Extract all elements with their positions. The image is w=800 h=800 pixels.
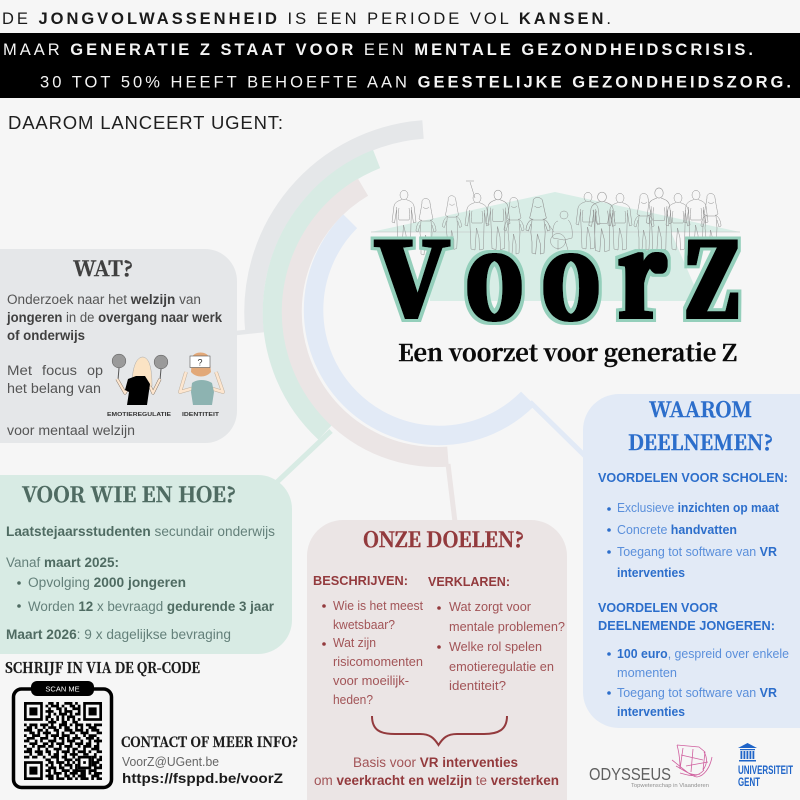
QR sign-up block: [5, 657, 200, 788]
list: beschrijven: Wat zijn: [333, 636, 376, 650]
list: verklaren: emotieregulatie en: [449, 660, 554, 674]
logo wordmark VoorZ: r: [618, 189, 667, 350]
logo: Universiteit Gent: [738, 743, 793, 789]
description text: Opvolging 2000 jongeren: [28, 575, 186, 590]
contact website: https://fsppd.be/voorZ: [122, 770, 283, 786]
person 9: [576, 192, 600, 249]
person 12: [634, 194, 654, 250]
icon captions: IDENTITEIT: [182, 412, 220, 418]
icon: pink ship: [672, 745, 712, 777]
panel: WAAROM DEELNEMEN: [583, 394, 800, 728]
icon captions: EMOTIEREGULATIE: [107, 412, 171, 418]
description text: jongeren in de overgang naar werk: [6, 310, 222, 325]
column headings: [313, 573, 510, 589]
person 16: [701, 194, 721, 250]
black banner: [0, 33, 800, 98]
list: verklaren: identiteit?: [449, 679, 506, 693]
scan me tab: [31, 681, 94, 696]
list: beschrijven: risicomomenten: [333, 655, 423, 669]
Odysseus tagline: Topwetenschap in Vlaanderen: [631, 783, 709, 789]
logo wordmark VoorZ: [375, 189, 739, 351]
description text: het belang van: [7, 381, 101, 396]
youth benefits list: momenten: [617, 666, 677, 680]
conclusion text: om veerkracht en welzijn te versterken: [314, 773, 559, 788]
description text: of onderwijs: [7, 328, 85, 343]
list: verklaren: Wat zorgt voor: [449, 600, 531, 614]
logo tagline: Een voorzet voor generatie Z: [398, 335, 737, 368]
person 13: [646, 188, 672, 250]
school benefits list: Concrete handvatten: [617, 523, 737, 537]
banner line: geestelijke gezondheidszorg: 30 TOT 50% HEEFT BEHOEFTE AAN GEESTELIJKE GEZONDHEIDSZORG.: [40, 74, 791, 92]
icon: identity person holding question card: [180, 352, 223, 405]
list: verklaren: Welke rol spelen: [449, 640, 542, 654]
pink ring to ONZE DOELEN panel: [292, 187, 455, 522]
person 7: [526, 198, 550, 254]
logo wordmark VoorZ: o: [542, 190, 600, 351]
person 2: [416, 198, 436, 255]
panel heading: WAT?: [73, 253, 133, 283]
conclusion text: [314, 755, 559, 788]
person 11: [608, 193, 632, 250]
list: beschrijven: Wie is het meest: [333, 599, 424, 613]
logo wordmark VoorZ: V: [375, 201, 449, 346]
panel: ONZE DOELEN: [307, 520, 567, 800]
column headings: BESCHRIJVEN:: [313, 573, 408, 588]
panel background: [307, 520, 567, 800]
description text: Worden 12 x bevraagd gedurende 3 jaar: [28, 599, 275, 614]
description text: Laatstejaarsstudenten secundair onderwijs: [6, 524, 275, 539]
school benefits list: Toegang tot software van VR: [617, 545, 777, 559]
sign-up heading: SCHRIJF IN VIA DE QR-CODE: [5, 657, 200, 678]
youth benefits list: [607, 647, 789, 719]
list: beschrijven: heden?: [333, 693, 373, 707]
list: beschrijven: [322, 599, 424, 707]
person 3: [442, 196, 462, 249]
description text: Onderzoek naar het welzijn van: [7, 292, 201, 307]
icon captions: [107, 412, 220, 418]
horizon line: [371, 231, 740, 233]
icon: university building: [738, 743, 757, 762]
UGent wordmark: GENT: [738, 775, 760, 789]
panel heading: DEELNEMEN?: [628, 427, 773, 457]
panel background: [0, 249, 237, 443]
description text: op: [87, 363, 103, 378]
green ring to VOOR WIE panel: [272, 159, 377, 483]
panel heading: WAAROM: [649, 394, 752, 424]
youth benefits list: Toegang tot software van VR: [617, 686, 777, 700]
person 4 holding a pole: [465, 181, 489, 250]
column headings: VERKLAREN:: [428, 574, 510, 589]
person in wheelchair: [549, 211, 572, 250]
person 15: [684, 190, 708, 247]
curly brace: [372, 716, 507, 745]
youth benefits list: interventies: [617, 705, 685, 719]
subheading: daarom lanceert ugent: DAAROM LANCEERT UGENT:: [8, 112, 283, 133]
description text: Met: [7, 363, 32, 378]
description text: focus: [42, 363, 77, 378]
person 5: [486, 190, 510, 250]
green mountain shape: [371, 192, 740, 301]
person 14: [666, 193, 690, 250]
icon: identity person holding question card: ?: [197, 358, 203, 368]
icon: emotion regulation woman with signs: [112, 354, 168, 405]
logo wordmark VoorZ: o: [466, 190, 523, 351]
grey ring to WAT panel: [236, 130, 423, 333]
panel background: [0, 475, 292, 654]
logo wordmark VoorZ: Z: [686, 201, 739, 346]
Odysseus wordmark: ODYSSEUS: [589, 764, 671, 784]
description text: voor mentaal welzijn: [7, 423, 135, 438]
blue ring to WAAROM panel: [314, 221, 585, 456]
crowd of line-drawn young people: [392, 181, 721, 255]
list: verklaren: [437, 600, 565, 693]
QR code: [24, 703, 102, 779]
panel heading: VOOR WIE EN HOE?: [22, 479, 236, 509]
logo: Odysseus: [589, 745, 712, 789]
panel background: [583, 394, 800, 728]
school benefits list: interventies: [617, 566, 685, 580]
person 10: [589, 192, 615, 252]
contact email: VoorZ@UGent.be: [122, 754, 219, 769]
person 6: [504, 198, 524, 254]
description text: [6, 524, 275, 642]
youth benefits heading: [598, 600, 775, 633]
school benefits list: [607, 501, 780, 580]
panel heading: [628, 394, 773, 457]
description text: Vanaf maart 2025:: [6, 555, 119, 570]
youth benefits heading: VOORDELEN VOOR: [598, 600, 719, 615]
contact heading: CONTACT OF MEER INFO?: [121, 732, 298, 752]
school benefits list: Exclusieve inzichten op maat: [617, 501, 780, 515]
header line: jongvolwassenheid: DE JONGVOLWASSENHEID IS EEN PERIODE VOL KANSEN.: [2, 10, 611, 28]
header intro statements: [0, 10, 800, 98]
VoorZ logo: [371, 181, 740, 368]
youth benefits list: 100 euro, gespreid over enkele: [617, 647, 789, 661]
description text: [6, 292, 222, 438]
list: beschrijven: voor moeilijk-: [333, 674, 409, 688]
list: verklaren: mentale problemen?: [449, 620, 565, 634]
panel heading: ONZE DOELEN?: [363, 524, 524, 554]
UGent wordmark: [738, 763, 793, 789]
concentric ring connectors: [236, 130, 585, 522]
QR frame: [14, 689, 112, 788]
contact block: [121, 732, 298, 786]
conclusion text: Basis voor VR interventies: [353, 755, 518, 770]
school benefits heading: VOORDELEN VOOR SCHOLEN:: [598, 470, 788, 485]
scan me tab: SCAN ME: [45, 684, 80, 694]
panel: VOOR WIE EN HOE: [0, 475, 292, 654]
list: beschrijven: kwetsbaar?: [333, 618, 395, 632]
person 1: [392, 190, 416, 247]
panel: WAT: [0, 249, 237, 443]
banner line: mentale gezondheidscrisis: MAAR GENERATIE Z STAAT VOOR EEN MENTALE GEZONDHEIDSCRISIS.: [3, 41, 753, 59]
description text: Maart 2026: 9 x dagelijkse bevraging: [6, 627, 231, 642]
youth benefits heading: DEELNEMENDE JONGEREN:: [598, 618, 775, 633]
